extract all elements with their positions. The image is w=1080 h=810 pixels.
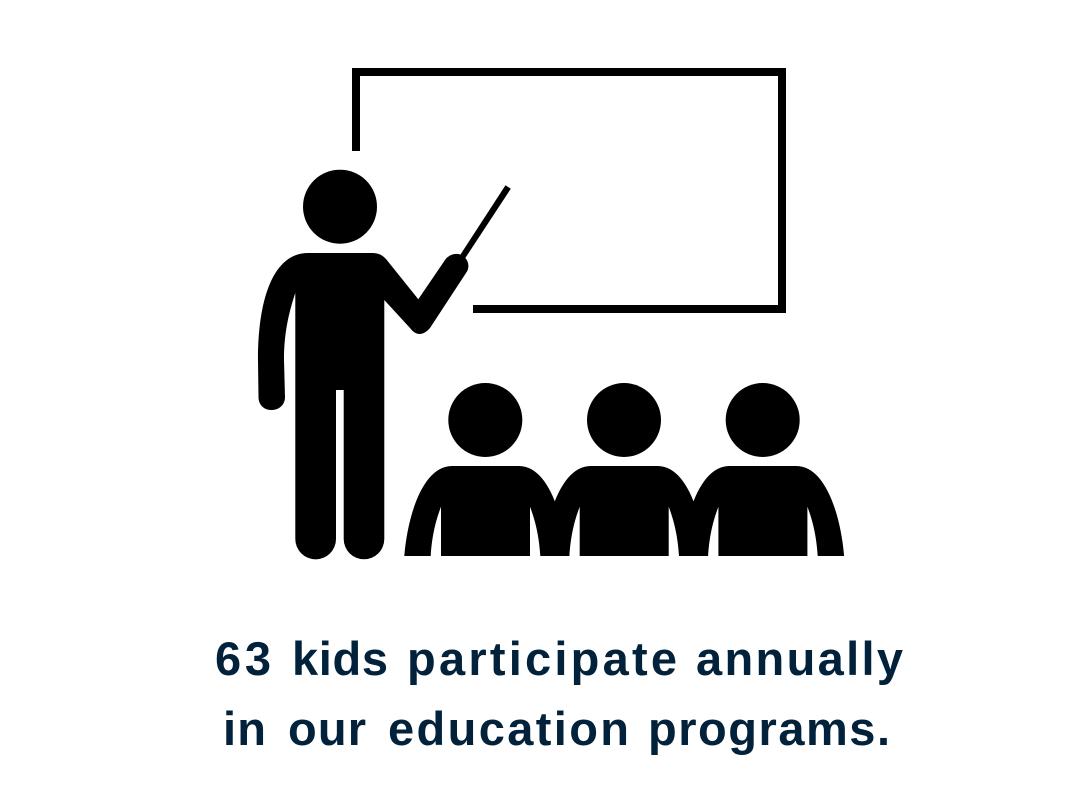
icon: teacher with pointer (258, 170, 511, 559)
caption: programs. (648, 702, 890, 755)
icon: whiteboard (356, 72, 782, 309)
caption (215, 632, 903, 755)
caption: education (388, 702, 629, 755)
icon: three students (404, 383, 844, 556)
caption: participate (407, 632, 677, 685)
caption: kids (292, 632, 388, 685)
caption: our (288, 702, 366, 755)
caption: 63 (215, 632, 271, 685)
caption: in (223, 702, 266, 755)
caption: annually (696, 632, 903, 685)
